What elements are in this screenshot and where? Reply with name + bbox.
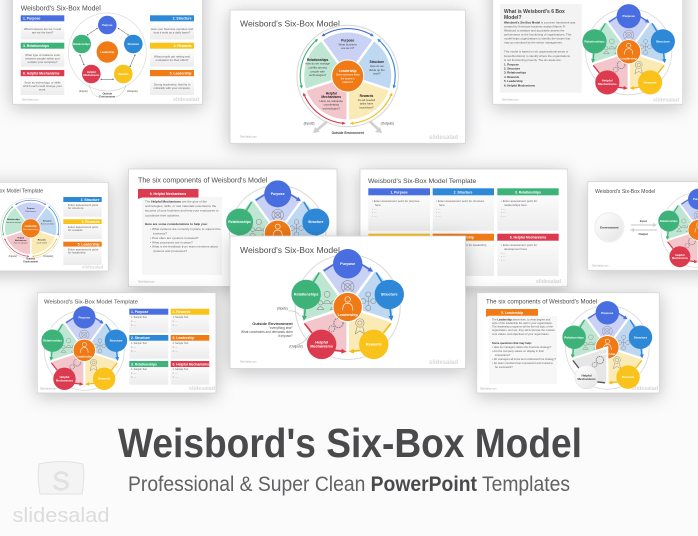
slide thumbnail: six components, leadership (bottom right): Structure: [634, 335, 647, 339]
slide thumbnail: circles with boxes (top left): Outside: [102, 91, 113, 95]
slide thumbnail: circles with boxes (top left): (Inputs): [79, 89, 88, 93]
slide thumbnail: wheel with text (top centre): technologies?: [323, 106, 340, 110]
slide thumbnail: pentagon with boxes template (bottom left): 3. ---: [131, 324, 136, 327]
slide thumbnail: six components, leadership (bottom right): The Leadership determines, to what degree and: [492, 318, 551, 322]
slide thumbnail: wheel template (middle left): Rewards: [38, 240, 46, 242]
slide thumbnail: six components, helpful mechanisms (middle centre left): • What systems are currently in place to support the: [150, 227, 221, 231]
slide thumbnail: six components, leadership (bottom right): Purpose: [601, 311, 614, 315]
slide thumbnail: wheel template (middle left): [0, 182, 108, 271]
slide thumbnail: wheel with text (top centre): (Inputs): [304, 122, 314, 126]
slide thumbnail: wheel template (middle left): 4. Rewards: [82, 220, 100, 224]
slide thumbnail: pentagon with boxes template (bottom left): Weisbord's Six-Box Model Template: [44, 299, 139, 305]
slide thumbnail: what is the model (top right): Leadership: [620, 57, 637, 61]
slide thumbnail: six components, helpful mechanisms (middle centre left): Leadership: [268, 239, 287, 243]
slide thumbnail: six components, helpful mechanisms (middle centre left): 6. Helpful Mechanisms: [150, 192, 186, 196]
slide thumbnail: circles with boxes (top left): which each could change your: [23, 84, 62, 88]
slide thumbnail: pentagon with boxes template (bottom left): 1. Sample Text: [131, 342, 147, 345]
slide thumbnail: circles with boxes (top left): 2. Structure: [173, 16, 192, 20]
slide thumbnail: six components, leadership (bottom right): [477, 293, 659, 393]
slide thumbnail: pentagon with boxes template (bottom left): 1. Sample Text: [172, 368, 189, 371]
slide thumbnail: six box grid template (middle centre right): development here: [504, 247, 528, 251]
diagram: six-box pentagon: Relationships: [294, 293, 318, 297]
slide thumbnail: environment input output (middle right): SlideSalad.com: [592, 264, 609, 268]
slide thumbnail: circles with boxes (top left): Mechanisms: [84, 73, 100, 77]
slide thumbnail: environment input output (middle right): Helpful: [675, 253, 685, 257]
diagram: six-box pentagon: Purpose: [340, 262, 355, 266]
diagram: six-box pentagon: Mechanisms: [310, 345, 333, 349]
slide thumbnail: what is the model (top right): Purpose: [623, 14, 635, 18]
slide thumbnail: pentagon with boxes template (bottom left): 3. ---: [131, 350, 136, 353]
slide thumbnail: wheel with text (top centre): work?: [373, 72, 381, 76]
slide thumbnail: wheel with text (top centre): Have we adequate: [320, 99, 343, 103]
slide thumbnail: six box grid template (middle centre right): slidesalad: [536, 279, 561, 285]
diagram: six-box pentagon: Helpful: [315, 341, 328, 345]
slide thumbnail: circles with boxes (top left): Such as technology, or skills: [24, 80, 61, 84]
slide thumbnail: wheel template (middle left): for rewards: [68, 228, 83, 232]
slide thumbnail: pentagon with boxes template (bottom left): slidesalad: [189, 386, 215, 392]
slide thumbnail: six components, helpful mechanisms (middle centre left): coordinate their activities.: [145, 213, 180, 217]
slide thumbnail: environment input output (middle right): Input: [640, 219, 647, 223]
slide thumbnail: wheel with text (top centre): conflict among: [309, 65, 327, 69]
slide thumbnail: what is the model (top right): created by American business analyst Marvin R.: [504, 25, 566, 29]
slide thumbnail: circles with boxes (top left): are we the best?: [32, 30, 54, 34]
slide thumbnail: six components, helpful mechanisms (middle centre left): SlideSalad.com: [138, 280, 155, 284]
slide thumbnail: circles with boxes (top left): What type of relations exist: [25, 53, 60, 57]
slide thumbnail: six box grid template (middle centre right): • ---: [436, 214, 441, 218]
slide thumbnail: six box grid template (middle centre right): • Enter assessment point for leadership: [436, 243, 487, 247]
slide thumbnail: pentagon with boxes template (bottom left): 1. Sample Text: [131, 368, 147, 371]
slide thumbnail: six box grid template (middle centre right): • ---: [436, 210, 441, 214]
slide thumbnail: six components, helpful mechanisms (middle centre left): The Helpful Mechanisms are the glue of the: [145, 199, 207, 203]
slide thumbnail: pentagon with boxes template (bottom left): 1. Sample Text: [172, 316, 189, 319]
slide thumbnail: what is the model (top right): boxes(functions) to identify where the organizations: [504, 54, 570, 58]
slide thumbnail: six box grid template (middle centre right): 4. Rewards: [390, 236, 408, 240]
slide thumbnail: what is the model (top right): What is Weisbord's 6 Box: [504, 9, 565, 15]
slide thumbnail: circles with boxes (top left): Strong leadership, that fits in: [154, 82, 191, 86]
slide thumbnail: pentagon with boxes template (bottom left): 3. ---: [172, 376, 178, 379]
slide thumbnail: pentagon with boxes template (bottom left): Helpful: [60, 375, 70, 379]
slide thumbnail: six components, leadership (bottom right): Helpful: [581, 373, 592, 377]
slide thumbnail: wheel with text (top centre): [230, 10, 466, 143]
slide thumbnail: six components, leadership (bottom right): • Are the company values on display in their: [492, 349, 544, 353]
slide thumbnail: wheel with text (top centre): people with: [311, 69, 325, 73]
slide thumbnail: main pentagon diagram (centre): SlideSalad.com: [240, 360, 257, 364]
slide thumbnail: six components, helpful mechanisms (middle centre left): systems and processes?: [153, 249, 187, 253]
slide thumbnail: six components, leadership (bottom right): 5. Leadership: [501, 311, 523, 315]
slide thumbnail: what is the model (top right): 5. Leadership: [504, 79, 523, 83]
slide thumbnail: pentagon with boxes template (bottom left): 3. ---: [172, 324, 178, 327]
slide thumbnail: six components, helpful mechanisms (middle centre left): business?: [153, 232, 167, 236]
slide thumbnail: pentagon with boxes template (bottom left): Relationships: [43, 339, 62, 343]
slide thumbnail: six box grid template (middle centre right): 1. Purpose: [390, 190, 408, 194]
slide thumbnail: what is the model (top right): SlideSalad.com: [502, 98, 519, 102]
slide thumbnail: wheel template (middle left): slidesalad: [82, 264, 104, 270]
slide thumbnail: wheel template (middle left): Enter assessment point: [68, 203, 98, 207]
slide thumbnail: wheel with text (top centre): SlideSalad.com: [240, 136, 257, 138]
slide thumbnail: what is the model (top right): 1. Purpose: [504, 62, 519, 66]
slide thumbnail: pentagon with boxes template (bottom left): 6. Helpful Mechanisms: [172, 362, 209, 366]
slide thumbnail: pentagon with boxes template (bottom left): Purpose: [79, 315, 90, 319]
slide thumbnail: six components, helpful mechanisms (middle centre left): Mechanisms: [243, 268, 264, 272]
slide thumbnail: circles with boxes (top left): Helpful: [87, 70, 96, 74]
slide thumbnail: wheel with text (top centre): Mechanisms: [321, 95, 341, 99]
slide thumbnail: six components, helpful mechanisms (middle centre left): • What processes are in place?: [150, 240, 193, 244]
slide thumbnail: six box grid template (middle centre right): • ---: [501, 207, 506, 211]
slide thumbnail: wheel template (middle left): Outside: [26, 258, 36, 260]
slide thumbnail: circles with boxes (top left): slidesalad: [173, 97, 199, 103]
slide thumbnail: wheel with text (top centre): What business: [338, 42, 358, 46]
slide thumbnail: six box grid template (middle centre right): • ---: [372, 214, 377, 218]
slide thumbnail: six box grid template (middle centre right): • Enter assessment point for: [501, 243, 537, 247]
slide thumbnail: circles with boxes (top left): motivation for their effort?: [156, 58, 189, 62]
slide thumbnail: six components, leadership (bottom right): Some questions that may help:: [492, 341, 532, 345]
slide thumbnail: wheel template (middle left): How do we divide: [41, 223, 54, 225]
slide thumbnail: pentagon with boxes template (bottom left): Leadership: [77, 355, 92, 359]
slide thumbnail: circles with boxes (top left): SlideSalad.com: [22, 98, 39, 102]
slide thumbnail: environment input output (middle right): Weisbord's Six-Box Model: [595, 189, 655, 195]
slide thumbnail: six box grid template (middle centre right): • ---: [501, 210, 506, 214]
slide thumbnail: six components, helpful mechanisms (middle centre left): [128, 169, 337, 286]
slide thumbnail: six box grid template (middle centre right): here: [439, 203, 445, 207]
diagram: six-box pentagon: Leadership: [338, 313, 358, 317]
slide thumbnail: what is the model (top right): Weisbord's Six-Box Model is a proven framework was: [504, 21, 576, 25]
slide thumbnail: wheel with text (top centre): Weisbord's Six-Box Model: [240, 18, 340, 28]
slide thumbnail: six box grid template (middle centre right): • ---: [501, 254, 506, 258]
slide thumbnail: wheel with text (top centre): Purpose: [341, 39, 354, 43]
slide thumbnail: what is the model (top right): Relationships: [584, 39, 605, 43]
slide thumbnail: wheel with text (top centre): Rewards: [360, 94, 374, 98]
slide thumbnail: wheel with text (top centre): How do we manage: [305, 62, 330, 66]
slide thumbnail: six components, helpful mechanisms (middle centre left): Purpose: [271, 192, 285, 196]
slide thumbnail: what is the model (top right): slidesalad: [653, 98, 679, 104]
slide thumbnail: six components, helpful mechanisms (middle centre left): The six components of Weisbord's Model: [138, 177, 268, 185]
slide thumbnail: wheel template (middle left): (Outputs): [43, 255, 53, 258]
slide thumbnail: six box grid template (middle centre right): [360, 169, 568, 287]
slide thumbnail: wheel template (middle left): Mechanisms: [15, 240, 27, 242]
slide thumbnail: wheel template (middle left): Enter assessment point: [68, 225, 98, 229]
callout: outside environment: "everything else": [269, 326, 293, 330]
slide thumbnail: circles with boxes (top left): Rewards: [118, 72, 129, 76]
slide thumbnail: pentagon with boxes template (bottom left): SlideSalad.com: [40, 388, 57, 390]
slide thumbnail: pentagon with boxes template (bottom left): 2. ---: [172, 320, 178, 323]
slide thumbnail: circles with boxes (top left): how it work as a daily basis?: [154, 30, 191, 34]
logo: slidesalad: slidesalad: [12, 504, 109, 527]
slide thumbnail: six components, leadership (bottom right): Relationships: [564, 335, 584, 339]
slide thumbnail: six box grid template (middle centre right): • Enter assessment point for: [501, 199, 537, 203]
slide thumbnail: wheel template (middle left): for leadership: [68, 250, 86, 254]
slide thumbnail: six components, helpful mechanisms (middle centre left): Helpful: [248, 264, 260, 268]
slide thumbnail: wheel template (middle left): How do we manage: [6, 222, 21, 224]
slide thumbnail: wheel with text (top centre): Outside Environment: [332, 131, 365, 135]
slide thumbnail: wheel with text (top centre): Leadership: [339, 69, 356, 73]
slide thumbnail: six components, helpful mechanisms (middle centre left): technologies, skills, or raw materials essential to the: [145, 204, 216, 208]
slide thumbnail: wheel with text (top centre): slidesalad: [429, 135, 458, 141]
slide thumbnail: six box grid template (middle centre right): • ---: [501, 251, 506, 255]
slide thumbnail: wheel with text (top centre): Structure: [370, 60, 384, 64]
callout: outside environment: Outside Environment: [252, 321, 293, 326]
slide thumbnail: circles with boxes (top left): How your business operates and: [151, 27, 193, 31]
slide thumbnail: circles with boxes (top left): 3. Relationships: [23, 44, 49, 48]
slide thumbnail: what is the model (top right): Structure: [656, 39, 670, 43]
slide thumbnail: environment input output (middle right): Relationships: [660, 219, 678, 223]
slide thumbnail: six components, leadership (bottom right): The leadership programs will be the hot topic of the: [492, 324, 553, 328]
slide thumbnail: wheel with text (top centre): (Outputs): [381, 122, 394, 126]
slide thumbnail: pentagon with boxes template (bottom left): 3. ---: [131, 376, 136, 379]
slide thumbnail: pentagon with boxes template (bottom left): Mechanisms: [56, 378, 73, 382]
slide thumbnail: circles with boxes (top left): 6. Helpful Mechanisms: [23, 71, 60, 75]
slide thumbnail: six components, leadership (bottom right): interactions?: [495, 353, 511, 357]
slide thumbnail: wheel template (middle left): Purpose: [27, 208, 35, 210]
slide thumbnail: six components, leadership (bottom right): style of the leadership fits well in your organization.: [492, 321, 553, 325]
slide thumbnail: pentagon with boxes template (bottom left): 3. Relationships: [131, 362, 157, 366]
slide thumbnail: six box grid template (middle centre right): • Enter assessment point for structure: [436, 199, 485, 203]
slide thumbnail: environment input output (middle right): [588, 182, 698, 270]
slide thumbnail: wheel with text (top centre): technologies?: [309, 73, 327, 77]
slide thumbnail: wheel template (middle left): Do all needed: [37, 242, 47, 244]
slide thumbnail: six components, helpful mechanisms (middle centre left): • What is the feedback from team members about: [150, 245, 218, 249]
slide thumbnail: pentagon with boxes template (bottom left): 2. ---: [172, 372, 178, 375]
slide thumbnail: pentagon with boxes template (bottom left): Structure: [110, 339, 123, 343]
slide thumbnail: six components, leadership (bottom right): Rewards: [622, 375, 635, 379]
slide thumbnail: six components, leadership (bottom right): SlideSalad.com: [480, 388, 497, 390]
slide thumbnail: pentagon with boxes template (bottom left): 2. ---: [172, 346, 178, 349]
slide thumbnail: wheel template (middle left): for structure: [68, 206, 84, 210]
slide thumbnail: six components, leadership (bottom right): be successful?: [495, 365, 513, 369]
slide thumbnail: main pentagon diagram (centre): Weisbord's Six-Box Model: [240, 245, 340, 255]
slide thumbnail: six components, leadership (bottom right): slidesalad: [632, 386, 658, 392]
slide thumbnail: main pentagon diagram (centre): slidesalad: [429, 360, 458, 366]
slide thumbnail: wheel with text (top centre): Does someone keep: [336, 73, 360, 77]
slide thumbnail: six box grid template (middle centre right): 2. Structure: [454, 190, 473, 194]
logo: slidesalad: [12, 462, 109, 527]
slide thumbnail: six box grid template (middle centre right): relationships here: [504, 203, 527, 207]
slide thumbnail: pentagon with boxes template (bottom left): 3. ---: [172, 350, 178, 353]
slide thumbnail: six box grid template (middle centre right): 3. Relationships: [515, 190, 541, 194]
diagram: six-box pentagon: Structure: [381, 293, 398, 297]
slide thumbnail: circles with boxes (top left): 1. Purpose: [23, 16, 40, 20]
slide thumbnail: six components, helpful mechanisms (middle centre left): Structure: [308, 220, 324, 224]
slide thumbnail: six components, leadership (bottom right): The six components of Weisbord's Model: [486, 298, 597, 305]
slide thumbnail: what is the model (top right): performance or the functioning of organizations. This: [504, 33, 572, 37]
slide thumbnail: six components, helpful mechanisms (middle centre left): • How often are systems reviewed?: [150, 236, 199, 240]
slide thumbnail: what is the model (top right): Mechanisms: [598, 82, 617, 86]
slide thumbnail: main pentagon diagram (centre): [230, 236, 466, 368]
slide thumbnail: circles with boxes (top left): (Outputs): [127, 89, 138, 93]
slide thumbnail: pentagon with boxes template (bottom left): 2. Structure: [131, 336, 150, 340]
slide thumbnail: six box grid template (middle centre right): Weisbord's Six-Box Model Template: [368, 178, 477, 185]
slide thumbnail: what is the model (top right): Helpful: [602, 79, 613, 83]
slide thumbnail: what is the model (top right): model helps organizations to identify the issues that: [504, 37, 570, 41]
slide thumbnail: pentagon with boxes template (bottom left): 5. Leadership: [172, 336, 194, 340]
slide thumbnail: what is the model (top right): [493, 0, 683, 104]
slide thumbnail: six box grid template (middle centre right): • Enter assessment point for purpose: [372, 199, 420, 203]
slide thumbnail: circles with boxes (top left): Structure: [128, 42, 140, 46]
slide thumbnail: six components, leadership (bottom right): • How do managers define the business strategy?: [492, 345, 552, 349]
slide thumbnail: what is the model (top right): may go unnoticed by the senior management.: [504, 41, 563, 45]
slide thumbnail: six box grid template (middle centre right): • ---: [372, 207, 377, 211]
slide thumbnail: what is the model (top right): This model is based on six organizational areas or: [504, 50, 568, 54]
slide thumbnail: circles with boxes (top left): 4. Rewards: [174, 44, 192, 48]
slide thumbnail: circles with boxes (top left): Environment: [99, 95, 115, 99]
slide thumbnail: wheel with text (top centre): balance?: [342, 80, 353, 84]
slide thumbnail: six components, leadership (bottom right): Leadership: [599, 352, 615, 356]
callout: outside environment: [241, 306, 308, 348]
slide thumbnail: what is the model (top right): is not functioning properly. The six areas are:: [504, 58, 562, 62]
slide thumbnail: wheel template (middle left): Relationships: [7, 218, 20, 221]
slide thumbnail: wheel template (middle left): Enter assessment point: [68, 248, 98, 252]
slide thumbnail: environment input output (middle right): Mechanisms: [672, 256, 688, 260]
slide thumbnail: wheel with text (top centre): are we in?: [341, 46, 355, 50]
slide thumbnail: wheel template (middle left): What business: [25, 210, 36, 213]
slide thumbnail: what is the model (top right): Rewards: [644, 80, 657, 84]
slide thumbnail: wheel template (middle left): Have we adequate: [14, 242, 28, 245]
diagram: six-box pentagon: Rewards: [366, 343, 382, 347]
slide thumbnail: what is the model (top right): 3. Relationships: [504, 71, 527, 75]
slide thumbnail: wheel with text (top centre): Helpful: [326, 91, 337, 95]
slide thumbnail: pentagon with boxes template (bottom left): [37, 293, 216, 393]
callout: outside environment: (Inputs): [277, 306, 288, 310]
slide thumbnail: six components, helpful mechanisms (middle centre left): Rewards: [294, 266, 309, 270]
callout: outside environment: What constraints and demands does: [241, 330, 293, 334]
slide thumbnail: pentagon with boxes template (bottom left): Rewards: [98, 377, 111, 381]
slide thumbnail: wheel with text (top centre): divide up the: [369, 68, 385, 72]
slide thumbnail: what is the model (top right): 4. Rewards: [504, 75, 520, 79]
slide thumbnail: circles with boxes (top left): between people within and: [25, 56, 60, 60]
slide thumbnail: wheel with text (top centre): Do all needed: [358, 98, 376, 102]
slide thumbnail: circles with boxes (top left): outside your company?: [28, 60, 58, 64]
slide thumbnail: what is the model (top right): Model?: [504, 15, 522, 21]
slide thumbnail: circles with boxes (top left): Leadership: [100, 50, 115, 54]
slide thumbnail: wheel template (middle left): Helpful: [17, 237, 24, 239]
slide thumbnail: what is the model (top right): 2. Structure: [504, 66, 520, 70]
slide thumbnail: what is the model (top right): Weisbord to analyze and accurately assess the: [504, 29, 565, 33]
slide thumbnail: circles with boxes (top left): culturally with your company.: [154, 86, 191, 90]
slide thumbnail: pentagon with boxes template (bottom left): 1. Sample Text: [131, 316, 147, 319]
slide thumbnail: circles with boxes (top left): What people get raising and: [154, 54, 190, 58]
slide thumbnail: circles with boxes (top left): 5. Leadership: [170, 71, 192, 75]
slide thumbnail: pentagon with boxes template (bottom left): 1. Sample Text: [172, 342, 189, 345]
slide thumbnail: six components, leadership (bottom right): • Do team members feel empowered and trusted to: [492, 361, 553, 365]
subtitle: Professional & Super Clean PowerPoint Templates: [128, 473, 570, 496]
slide thumbnail: wheel template (middle left): Leadership: [25, 225, 37, 228]
slide thumbnail: six components, helpful mechanisms (middle centre left): success of your business and help your employees to: [145, 209, 219, 213]
slide thumbnail: pentagon with boxes template (bottom left): 2. ---: [131, 346, 136, 349]
slide thumbnail: wheel with text (top centre): How do we: [370, 64, 384, 68]
title: Weisbord's Six-Box Model: [118, 420, 582, 466]
slide thumbnail: six components, leadership (bottom right): organization, and are, they will improvise the mission,: [492, 328, 556, 332]
logo: slidesalad: S: [52, 466, 70, 496]
slide thumbnail: six box grid template (middle centre right): 5. Leadership: [452, 236, 474, 240]
slide thumbnail: six components, helpful mechanisms (middle centre left): Relationships: [228, 220, 251, 224]
diagram: six-box pentagon: [291, 249, 404, 360]
slide thumbnail: circles with boxes (top left): [12, 0, 202, 104]
slide thumbnail: environment input output (middle right): Output: [639, 232, 648, 236]
slide thumbnail: six box grid template (middle centre right): here: [375, 203, 381, 207]
slide thumbnail: circles with boxes (top left): Purpose: [102, 23, 113, 27]
slide thumbnail: wheel template (middle left): 2. Structure: [81, 198, 100, 202]
slide thumbnail: six box grid template (middle centre right): • ---: [501, 258, 506, 262]
slide thumbnail: wheel with text (top centre): tasks have: [360, 102, 374, 106]
slide thumbnail: wheel template (middle left): Structure: [43, 220, 53, 223]
slide thumbnail: six components, leadership (bottom right): • Do managers all know and understand the strategy?: [492, 357, 556, 361]
slide thumbnail: circles with boxes (top left): Relationships: [73, 42, 91, 46]
slide thumbnail: pentagon with boxes template (bottom left): 4. Rewards: [172, 310, 191, 314]
slide thumbnail: wheel template (middle left): Does someone keep: [23, 229, 38, 231]
slide thumbnail: six components, leadership (bottom right): core values, and objectives of your organization.: [492, 332, 550, 336]
slide thumbnail: circles with boxes (top left): Weisbord's Six-Box Model: [21, 6, 101, 12]
slide thumbnail: wheel template (middle left): 5. Leadership: [78, 242, 100, 246]
slide thumbnail: wheel with text (top centre): coordinating: [324, 103, 339, 107]
slide thumbnail: wheel with text (top centre): Relationships: [307, 58, 329, 62]
slide thumbnail: what is the model (top right): 6. Helpful Mechanisms: [504, 83, 536, 87]
slide thumbnail: pentagon with boxes template (bottom left): 1. Purpose: [131, 310, 148, 314]
slide thumbnail: six components, helpful mechanisms (middle centre left): Here are some considerations to help you:: [145, 222, 208, 226]
slide thumbnail: circles with boxes (top left): work.: [39, 88, 46, 92]
slide thumbnail: wheel with text (top centre): the boxes in: [341, 76, 355, 80]
slide thumbnail: six box grid template (middle centre right): 6. Helpful Mechanisms: [510, 236, 546, 240]
callout: outside environment: it impose?: [278, 334, 293, 338]
slide thumbnail: environment input output (middle right): Environment: [600, 225, 618, 229]
slide thumbnail: six components, leadership (bottom right): Mechanisms: [578, 377, 596, 381]
callout: outside environment: (Outputs): [289, 344, 303, 348]
slide thumbnail: six box grid template (middle centre right): • ---: [501, 214, 506, 218]
slide thumbnail: wheel template (middle left): (Inputs): [9, 255, 17, 258]
slide thumbnail: six box grid template (middle centre right): • ---: [372, 210, 377, 214]
slide thumbnail: pentagon with boxes template (bottom left): 2. ---: [131, 320, 136, 323]
slide thumbnail: circles with boxes (top left): What business are we in and: [24, 27, 61, 31]
slide thumbnail: wheel template (middle left): Environment: [23, 260, 38, 264]
slide thumbnail: pentagon with boxes template (bottom left): 2. ---: [131, 372, 136, 375]
slide thumbnail: wheel with text (top centre): incentives?: [359, 105, 374, 109]
slide thumbnail: six box grid template (middle centre right): • ---: [436, 207, 441, 211]
slide thumbnail: six box grid template (middle centre right): here: [439, 247, 445, 251]
